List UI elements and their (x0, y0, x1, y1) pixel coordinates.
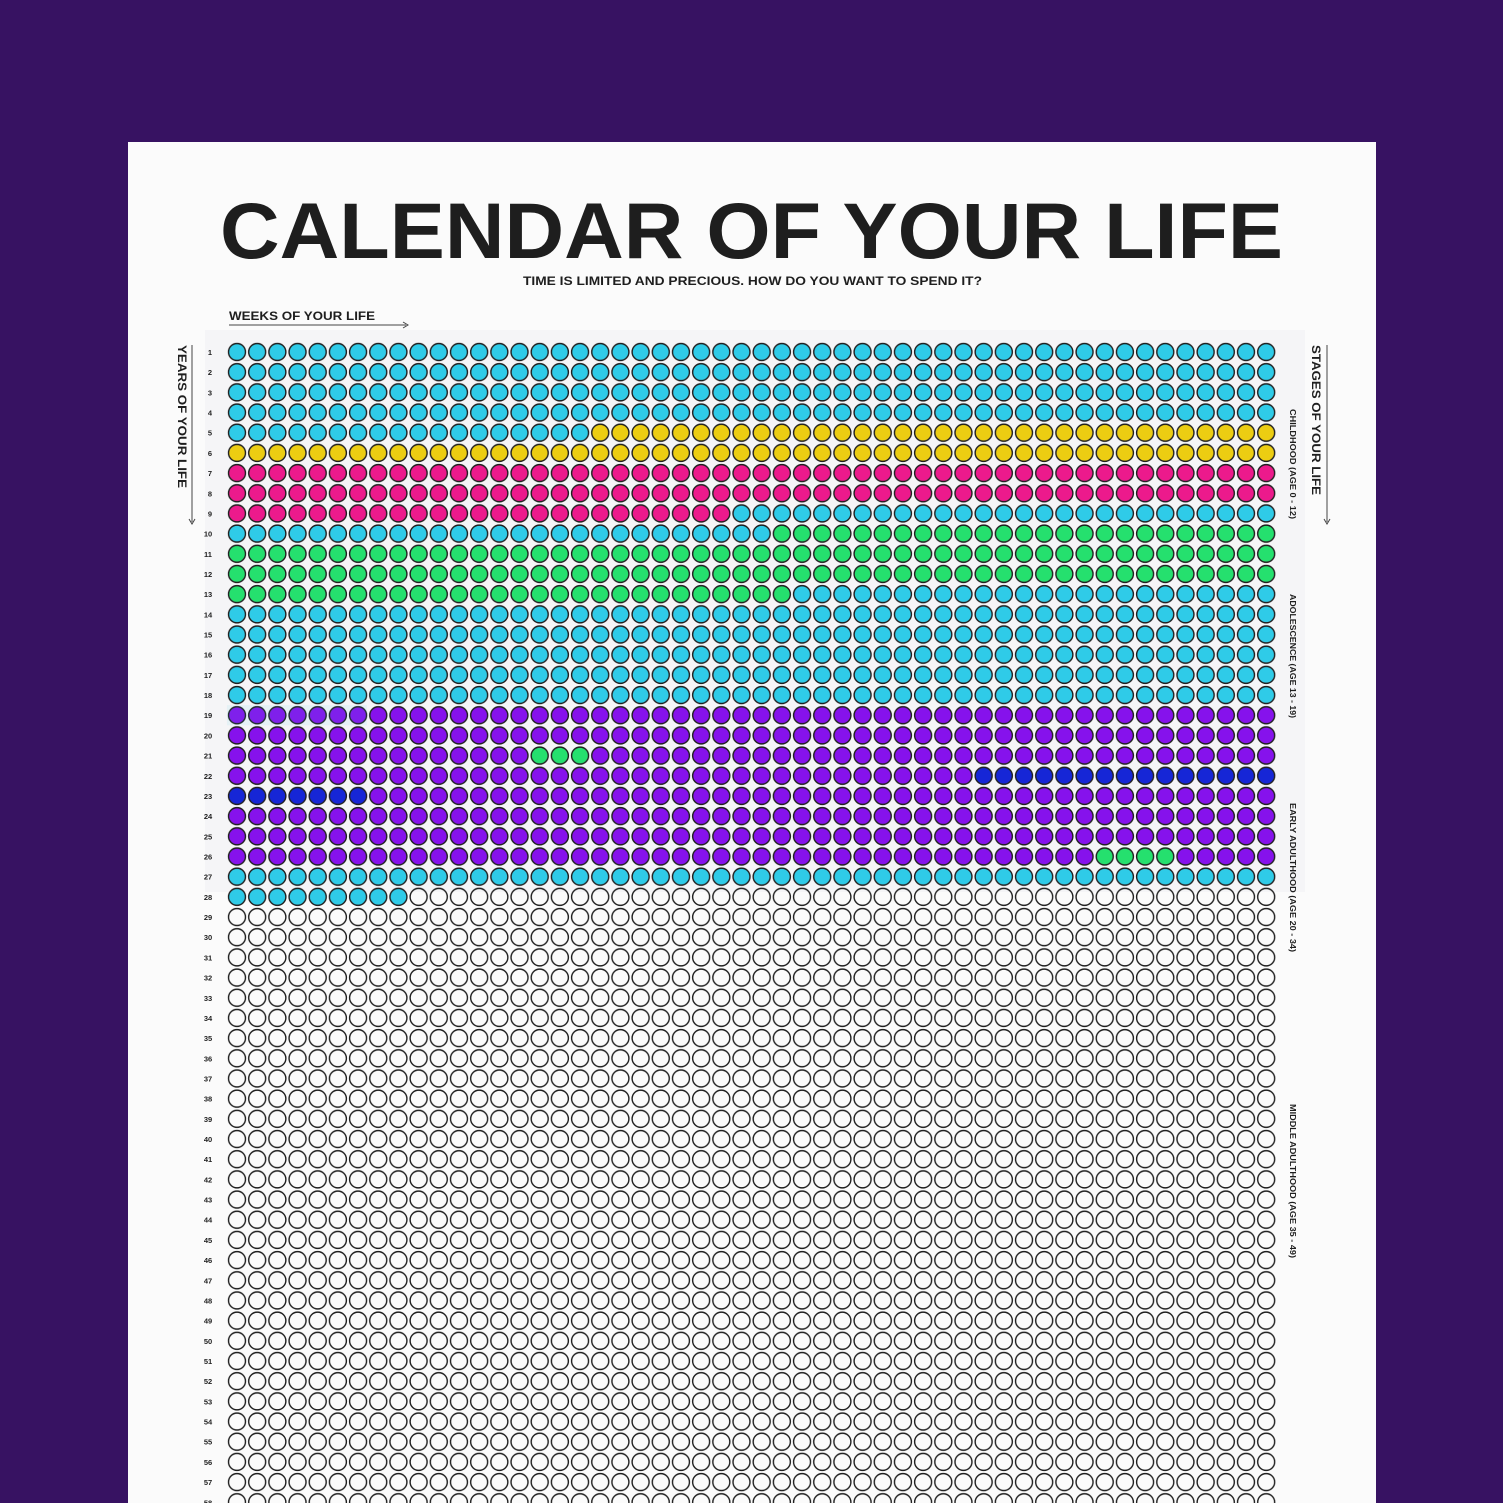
row numbers: 26 (204, 852, 212, 862)
row numbers: 4 (208, 408, 213, 418)
row numbers (204, 348, 213, 1503)
axis label: weeks (229, 309, 408, 328)
row numbers: 35 (204, 1034, 212, 1043)
row numbers: 54 (204, 1418, 213, 1426)
row numbers: 3 (208, 388, 212, 397)
row numbers: 32 (204, 974, 212, 983)
row numbers: 27 (204, 873, 212, 882)
stage labels: MIDDLE ADULTHOOD (AGE 35 - 49) (1288, 1104, 1297, 1258)
axis label: years (175, 345, 195, 524)
row numbers: 47 (204, 1276, 212, 1285)
row numbers: 11 (204, 550, 212, 559)
row numbers: 33 (204, 994, 212, 1003)
row numbers: 18 (204, 691, 212, 700)
row numbers: 55 (204, 1438, 212, 1447)
row numbers: 8 (208, 489, 212, 498)
row numbers: 5 (208, 429, 212, 438)
row numbers: 19 (204, 711, 212, 720)
row numbers: 31 (204, 953, 212, 962)
row numbers: 10 (204, 530, 212, 539)
row numbers: 40 (204, 1135, 212, 1144)
row numbers: 2 (208, 368, 212, 377)
title: CALENDAR OF YOUR LIFE (220, 186, 1283, 275)
row numbers: 46 (204, 1256, 212, 1265)
row numbers: 23 (204, 792, 212, 801)
row numbers: 41 (204, 1155, 212, 1164)
stage labels: CHILDHOOD (AGE 0 - 12) (1288, 409, 1297, 519)
row numbers: 44 (204, 1216, 213, 1225)
axis label: weeks: WEEKS OF YOUR LIFE (229, 309, 375, 323)
row numbers: 53 (204, 1397, 212, 1406)
row numbers: 28 (204, 893, 212, 902)
row numbers: 57 (204, 1478, 212, 1487)
axis label: years: YEARS OF YOUR LIFE (175, 345, 189, 488)
stage labels: EARLY ADULTHOOD (AGE 20 - 34) (1288, 803, 1297, 952)
row numbers: 17 (204, 671, 212, 680)
row numbers: 25 (204, 832, 212, 841)
row numbers: 14 (204, 610, 213, 619)
week grid (227, 342, 1276, 1503)
row numbers: 6 (208, 449, 212, 458)
row numbers: 49 (204, 1317, 212, 1326)
row numbers: 37 (204, 1074, 212, 1084)
paper poster (128, 142, 1376, 1503)
row numbers: 13 (204, 590, 212, 599)
row numbers: 22 (204, 772, 212, 781)
soft cyan edge on row 19 left (227, 705, 367, 725)
row numbers: 20 (204, 731, 212, 740)
row numbers: 24 (204, 812, 213, 821)
row numbers: 21 (204, 752, 212, 761)
row numbers: 51 (204, 1357, 212, 1366)
row numbers: 43 (204, 1196, 212, 1205)
stage labels (1288, 409, 1297, 1258)
row numbers: 7 (208, 469, 212, 478)
row numbers: 9 (208, 509, 212, 518)
row numbers: 38 (204, 1095, 212, 1104)
row numbers: 50 (204, 1337, 212, 1346)
stage labels: ADOLESCENCE (AGE 13 - 19) (1288, 594, 1297, 718)
subtitle: TIME IS LIMITED AND PRECIOUS. HOW DO YOU WANT TO SPEND IT? (523, 276, 982, 288)
row numbers: 45 (204, 1236, 212, 1245)
row numbers: 52 (204, 1377, 212, 1386)
row numbers: 56 (204, 1458, 212, 1467)
row numbers: 15 (204, 630, 212, 640)
row numbers: 48 (204, 1296, 212, 1306)
row numbers: 42 (204, 1175, 212, 1184)
row numbers: 16 (204, 651, 212, 660)
grid backdrop (205, 330, 1305, 892)
row numbers: 1 (208, 348, 212, 357)
row numbers: 30 (204, 933, 212, 942)
row numbers: 34 (204, 1014, 213, 1023)
row numbers: 12 (204, 570, 212, 579)
axis label: stages: STAGES OF YOUR LIFE (1309, 345, 1323, 495)
row numbers: 36 (204, 1054, 212, 1063)
axis label: stages (1309, 345, 1330, 524)
row numbers: 29 (204, 913, 212, 922)
row numbers: 39 (204, 1115, 212, 1124)
